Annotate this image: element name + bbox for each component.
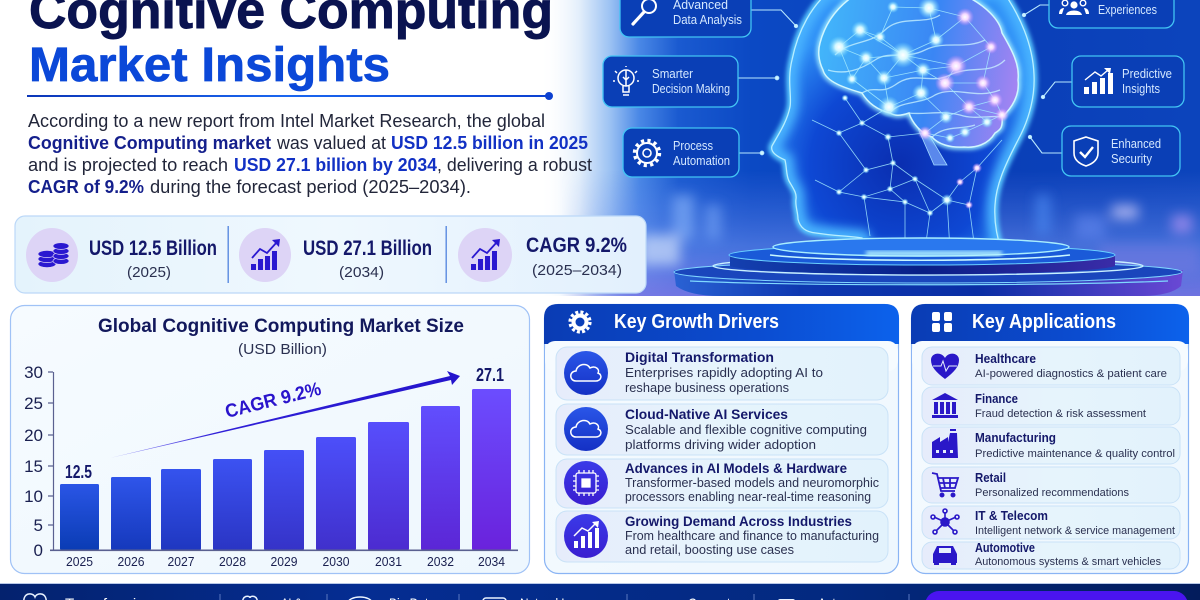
call to action button [925, 591, 1188, 600]
chart title: (USD Billion) [238, 341, 327, 358]
intro paragraph: USD 27.1 billion by 2034 [234, 155, 437, 175]
drivers header: Key Growth Drivers [614, 311, 779, 333]
driver: Advances in AI Models & Hardware: processors enabling near-real-time reasoning [625, 489, 871, 504]
callout: Predictive Insights [1072, 56, 1184, 107]
application: Manufacturing [922, 427, 1180, 464]
icon: network [931, 509, 959, 534]
x axis labels: 2027 [168, 554, 194, 569]
x axis labels: 2032 [427, 554, 454, 569]
application: IT & Telecom [922, 506, 1180, 539]
application: Manufacturing: Predictive maintenance & quality control [975, 448, 1175, 460]
label: CAGR 9.2%: CAGR 9.2% [223, 379, 323, 423]
y axis: 25 [24, 394, 43, 413]
callout: Process Automation: Automation [673, 154, 730, 168]
icon: vehicle [778, 599, 795, 600]
callout connectors [738, 5, 1072, 155]
application: Finance: Finance [975, 391, 1018, 406]
application: Manufacturing: Manufacturing [975, 430, 1056, 445]
stat: USD 12.5 Billion: (2025) [127, 264, 171, 281]
driver: Advances in AI Models & Hardware [556, 459, 888, 508]
driver: Growing Demand Across Industries: From healthcare and finance to manufacturing [625, 528, 879, 543]
application: Retail: Retail [975, 470, 1006, 485]
bottom strip [0, 583, 1200, 600]
driver: Digital Transformation: Enterprises rapidly adopting AI to [625, 365, 823, 380]
driver: Cloud-Native AI Services: platforms driving wider adoption [625, 437, 816, 452]
callout: Enhanced Security: Security [1111, 152, 1153, 166]
stat: CAGR 9.2% [458, 228, 627, 282]
driver: Digital Transformation: Digital Transformation [625, 349, 774, 365]
driver: Advances in AI Models & Hardware: Advances in AI Models & Hardware [625, 460, 847, 476]
icon: bank [932, 393, 958, 418]
stat: USD 27.1 Billion [239, 228, 432, 282]
stat: CAGR 9.2%: CAGR 9.2% [526, 234, 627, 257]
x axis labels: 2034 [478, 554, 505, 569]
value label: 12.5: 12.5 [65, 462, 92, 482]
intro paragraph: during the forecast period (2025–2034). [150, 177, 471, 197]
stat: CAGR 9.2%: (2025–2034) [532, 262, 622, 279]
icon: factory [932, 429, 958, 458]
icon: coins [38, 243, 69, 268]
y axis: 15 [24, 457, 43, 476]
application: IT & Telecom: IT & Telecom [975, 508, 1048, 523]
icon: car [933, 546, 957, 565]
x axis labels [66, 554, 505, 569]
driver: Growing Demand Across Industries [556, 511, 888, 562]
application: IT & Telecom: Intelligent network & service management [975, 525, 1175, 537]
icon: gear [570, 312, 590, 332]
icon: heart [931, 354, 959, 379]
x axis labels: 2026 [118, 554, 144, 569]
icon: cloud [571, 364, 601, 381]
callout: Advanced Data Analysis: Data Analysis [673, 13, 742, 27]
arrow: CAGR trend [110, 371, 460, 458]
driver: Cloud-Native AI Services [556, 404, 888, 455]
callout: Enhanced Security [1062, 126, 1180, 176]
x axis labels: 2030 [322, 554, 350, 569]
y axis: 0 [34, 541, 43, 560]
callout: Process Automation: Process [673, 139, 713, 153]
applications header: Key Applications [972, 311, 1116, 333]
x axis labels: 2025 [66, 554, 93, 569]
stat: USD 12.5 Billion: USD 12.5 Billion [89, 237, 217, 260]
icon: growth chart [251, 239, 280, 270]
intro paragraph: Cognitive Computing market [28, 133, 271, 153]
icon: rising bars [1084, 68, 1113, 94]
driver: Cloud-Native AI Services: Cloud-Native AI Services [625, 406, 788, 422]
callout: Enhanced Security: Enhanced [1111, 137, 1161, 151]
application: Healthcare [922, 347, 1180, 385]
y axis: 20 [24, 426, 43, 445]
icon: cloud [571, 420, 601, 437]
stat: USD 27.1 Billion: USD 27.1 Billion [303, 237, 432, 260]
intro paragraph: CAGR of 9.2% [28, 177, 144, 197]
stat: USD 27.1 Billion: (2034) [339, 264, 384, 281]
bar chart [50, 389, 518, 551]
intro paragraph [28, 111, 592, 197]
y axis: 10 [24, 487, 43, 506]
callout: Predictive Insights: Insights [1122, 82, 1160, 96]
icon: gear [634, 140, 660, 166]
stats panel [15, 216, 646, 293]
intro paragraph: was valued at [276, 133, 386, 153]
callout: Predictive Insights: Predictive [1122, 67, 1172, 81]
callout: Process Automation [623, 128, 739, 177]
x axis labels: 2029 [270, 554, 298, 569]
application: Automotive [922, 540, 1180, 569]
intro paragraph: and is projected to reach [28, 155, 228, 175]
driver: Digital Transformation [556, 347, 888, 400]
value label: 27.1: 27.1 [476, 365, 504, 385]
intro paragraph: , delivering a robust [437, 155, 592, 175]
driver: Growing Demand Across Industries: Growing Demand Across Industries [625, 513, 852, 529]
title rule [27, 92, 553, 100]
chart title [98, 316, 464, 358]
callout: Experiences: Experiences [1098, 3, 1157, 17]
applications header [911, 304, 1189, 371]
callout: Smarter Decision Making [603, 56, 738, 107]
intro paragraph: According to a new report from Intel Market Research, the global [28, 111, 545, 131]
y axis [24, 363, 54, 560]
icon: cart [932, 473, 958, 497]
application: Finance: Fraud detection & risk assessment [975, 408, 1146, 420]
icon: shield [1074, 137, 1098, 166]
icon: speech box [483, 598, 506, 600]
application: Automotive: Autonomous systems & smart vehicles [975, 556, 1161, 568]
icon: database [348, 597, 372, 600]
icon: people [1059, 0, 1089, 15]
x axis labels: 2031 [375, 554, 402, 569]
application: Retail [922, 467, 1180, 503]
icon: AI [243, 596, 257, 600]
icon: magnifier [633, 0, 656, 24]
callout: Advanced Data Analysis [620, 0, 751, 37]
icon: grid [932, 312, 952, 332]
icon: light bulb [613, 66, 639, 95]
stat: USD 12.5 Billion [26, 228, 217, 282]
application: Retail: Personalized recommendations [975, 487, 1129, 499]
icon: chip [573, 470, 599, 496]
chart title: Global Cognitive Computing Market Size [98, 316, 464, 337]
driver: Digital Transformation: reshape business operations [625, 380, 789, 395]
panel: key growth drivers [544, 304, 899, 574]
intro paragraph: USD 12.5 billion in 2025 [391, 133, 588, 153]
x axis labels: 2028 [219, 554, 246, 569]
application: Finance [922, 387, 1180, 425]
application: Automotive: Automotive [975, 540, 1035, 555]
panel: market size chart [10, 306, 530, 574]
y axis: 5 [34, 516, 43, 535]
driver: Growing Demand Across Industries: and retail, boosting use cases [625, 542, 794, 557]
title: Market Insights [29, 39, 390, 92]
drivers header [544, 304, 899, 371]
icon: brain outline [24, 594, 46, 600]
callout: Smarter Decision Making: Decision Making [652, 82, 730, 96]
hero illustration: AI head on platform [540, 0, 1200, 296]
application: Healthcare: AI-powered diagnostics & patient care [975, 368, 1167, 380]
icon: growth chart [574, 521, 599, 548]
callout: Experiences [1049, 0, 1174, 28]
y axis: 30 [24, 363, 43, 382]
application: Healthcare: Healthcare [975, 351, 1036, 366]
callout: Smarter Decision Making: Smarter [652, 67, 693, 81]
panel: key applications [911, 304, 1189, 574]
driver: Cloud-Native AI Services: Scalable and flexible cognitive computing [625, 422, 867, 437]
icon: growth chart [471, 239, 500, 270]
title [29, 0, 553, 92]
driver: Advances in AI Models & Hardware: Transformer-based models and neuromorphic [625, 475, 879, 490]
